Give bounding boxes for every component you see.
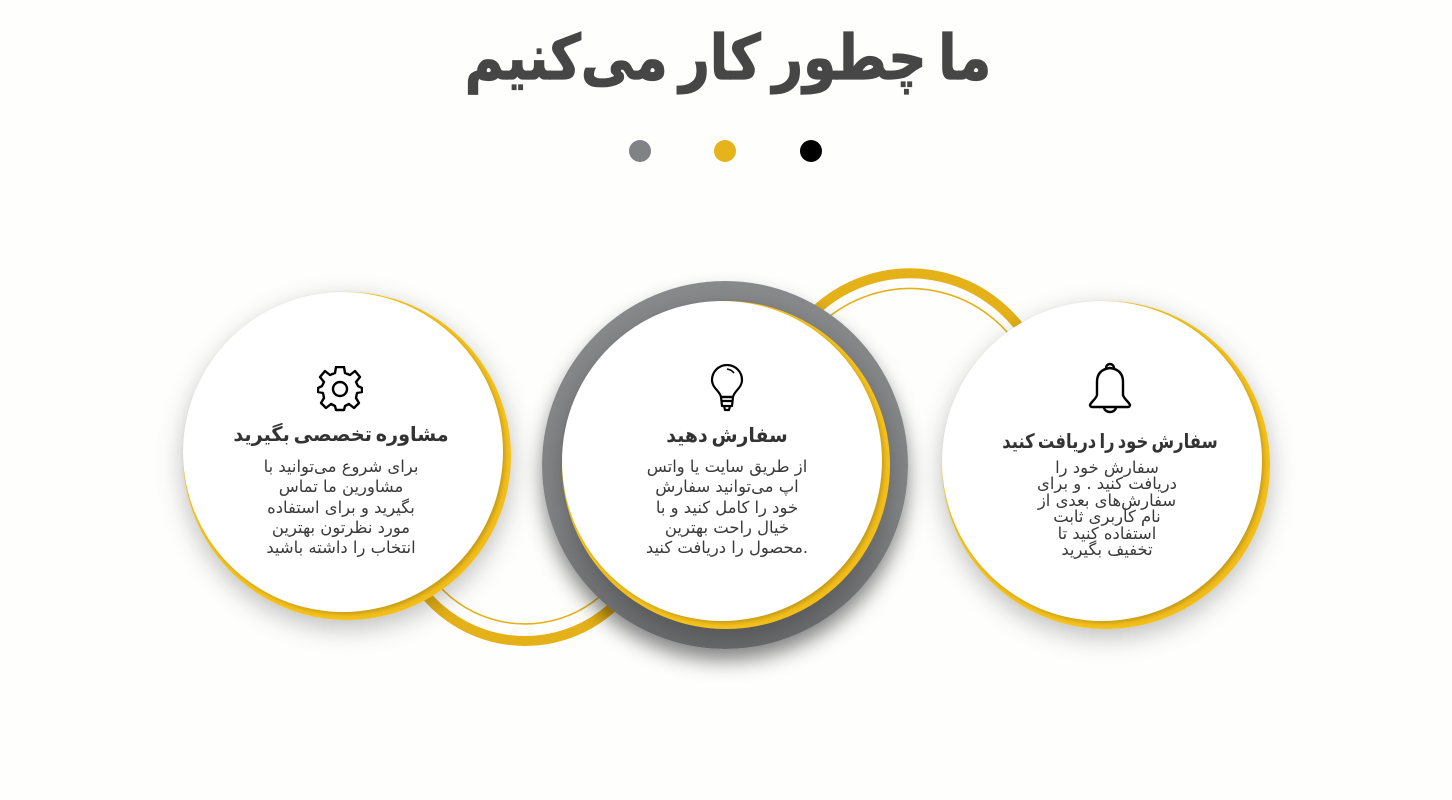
title: ما چطور کار می‌کنیم	[465, 21, 991, 94]
text block: محصول را دریافت کنید.	[646, 538, 808, 557]
icon: light bulb	[710, 364, 744, 412]
icon: gear	[317, 366, 363, 412]
text block: سفارش خود را	[1055, 458, 1159, 477]
text block: تخفیف بگیرید	[1061, 540, 1153, 559]
text block: از طریق سایت یا واتس	[647, 457, 807, 476]
heading: سفارش خود را دریافت کنید	[1002, 429, 1218, 453]
text block: مشاورین ما تماس	[279, 477, 403, 496]
text block: انتخاب را داشته باشید	[266, 538, 416, 557]
legend dots	[629, 140, 822, 162]
text block	[264, 457, 418, 557]
text block: نام کاربری ثابت	[1053, 507, 1161, 526]
text block: دریافت کنید . و برای	[1037, 474, 1177, 493]
panel: grey ring	[542, 281, 908, 649]
text block: خود را کامل کنید و با	[656, 498, 798, 517]
text block: سفارش‌های بعدی از	[1038, 491, 1176, 510]
heading: سفارش دهید	[666, 423, 788, 447]
panel: step 2 order	[554, 299, 898, 644]
text block: برای شروع می‌توانید با	[264, 457, 418, 476]
text block: بگیرید و برای استفاده	[267, 498, 415, 517]
text block: مورد نظرتون بهترین	[272, 518, 410, 537]
text block: استفاده کنید تا	[1058, 524, 1156, 543]
panel: step 1 consultation	[170, 286, 524, 642]
heading: مشاوره تخصصی بگیرید	[233, 422, 449, 446]
panel: step 3 receive	[928, 296, 1284, 650]
icon: bell	[1088, 362, 1132, 414]
text block	[646, 457, 808, 557]
text block: خیال راحت بهترین	[665, 518, 789, 537]
text block: اپ می‌توانید سفارش	[655, 477, 799, 496]
text block	[1037, 458, 1177, 559]
